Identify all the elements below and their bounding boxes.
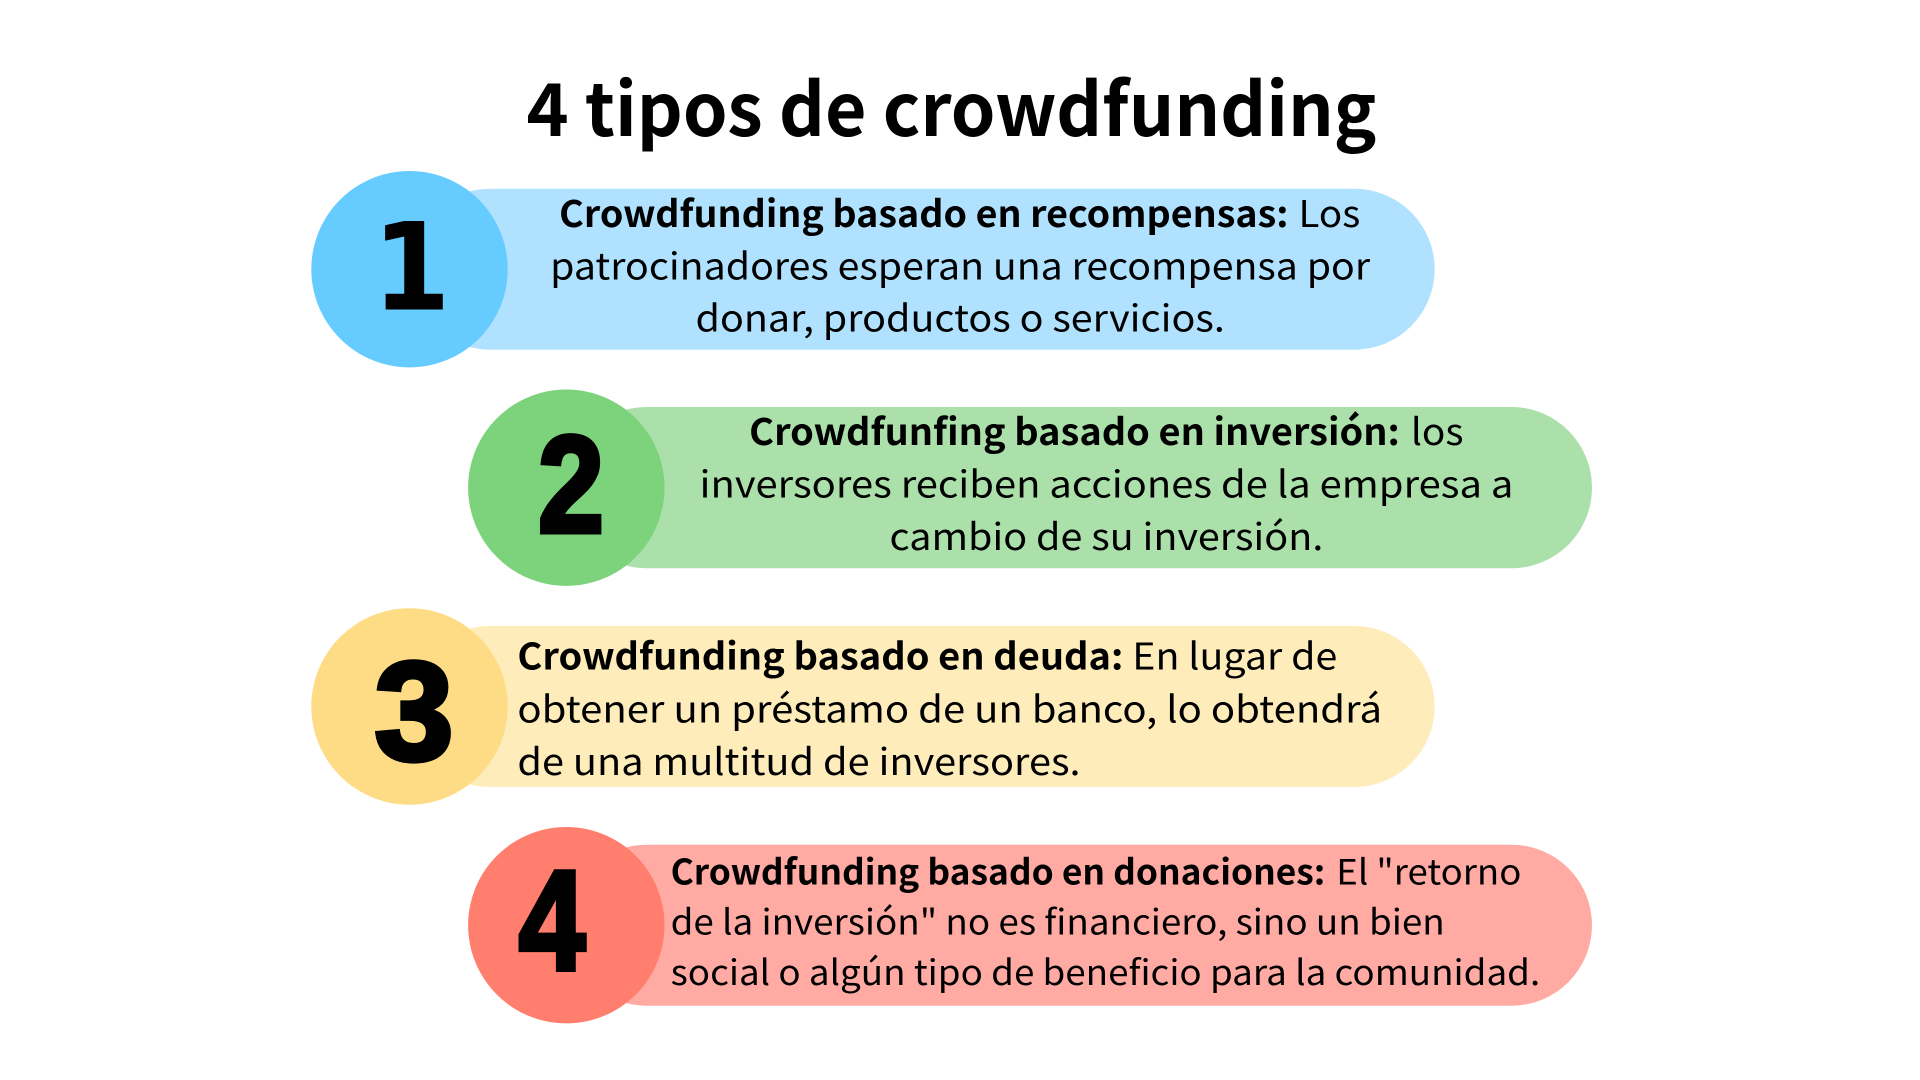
number 1: 1 (372, 197, 450, 338)
text block 1: patrocinadores esperan una recompensa por (550, 237, 1371, 291)
text block 3 (517, 627, 1382, 786)
title: 4 tipos de crowdfunding (526, 52, 1376, 158)
text block 2: los (1411, 402, 1464, 456)
number 4: 4 (519, 842, 585, 1000)
number circle 2 (468, 390, 664, 586)
text block 1 (550, 184, 1371, 342)
text block 4 (671, 846, 1540, 996)
number 3: 3 (374, 632, 454, 790)
text block 3: En lugar de (1132, 627, 1337, 681)
text block 2: inversores reciben acciones de la empresa a (700, 454, 1513, 508)
panel: item 3 debt (311, 608, 1435, 805)
text block 1: Los (1298, 184, 1360, 238)
text block 1: Crowdfunding basado en recompensas: (559, 184, 1288, 238)
text block 3: de una multitud de inversores. (517, 732, 1081, 786)
text block 3: obtener un préstamo de un banco, lo obtendrá (517, 679, 1382, 733)
text block 4: Crowdfunding basado en donaciones: (671, 846, 1325, 896)
text block 2: cambio de su inversión. (890, 507, 1323, 561)
panel: item 2 investment (468, 390, 1592, 586)
pill 2 background (566, 407, 1592, 568)
text block 3: Crowdfunding basado en deuda: (517, 627, 1123, 681)
panel: item 4 donations (468, 827, 1592, 1023)
pill 1 background (410, 189, 1435, 350)
text block 2 (700, 402, 1513, 561)
text block 2: Crowdfunfing basado en inversión: (749, 402, 1400, 456)
pill 3 background (410, 626, 1435, 787)
number circle 1 (311, 171, 508, 367)
number 2: 2 (538, 408, 604, 562)
text block 4: de la inversión" no es financiero, sino un bien (671, 896, 1445, 946)
text block 4: El "retorno (1336, 846, 1521, 896)
number circle 4 (468, 827, 664, 1023)
number circle 3 (311, 608, 508, 805)
panel: item 1 rewards (311, 171, 1435, 367)
text block 1: donar, productos o servicios. (696, 288, 1225, 342)
pill 4 background (566, 845, 1592, 1006)
text block 4: social o algún tipo de beneficio para la comunidad. (671, 946, 1540, 996)
